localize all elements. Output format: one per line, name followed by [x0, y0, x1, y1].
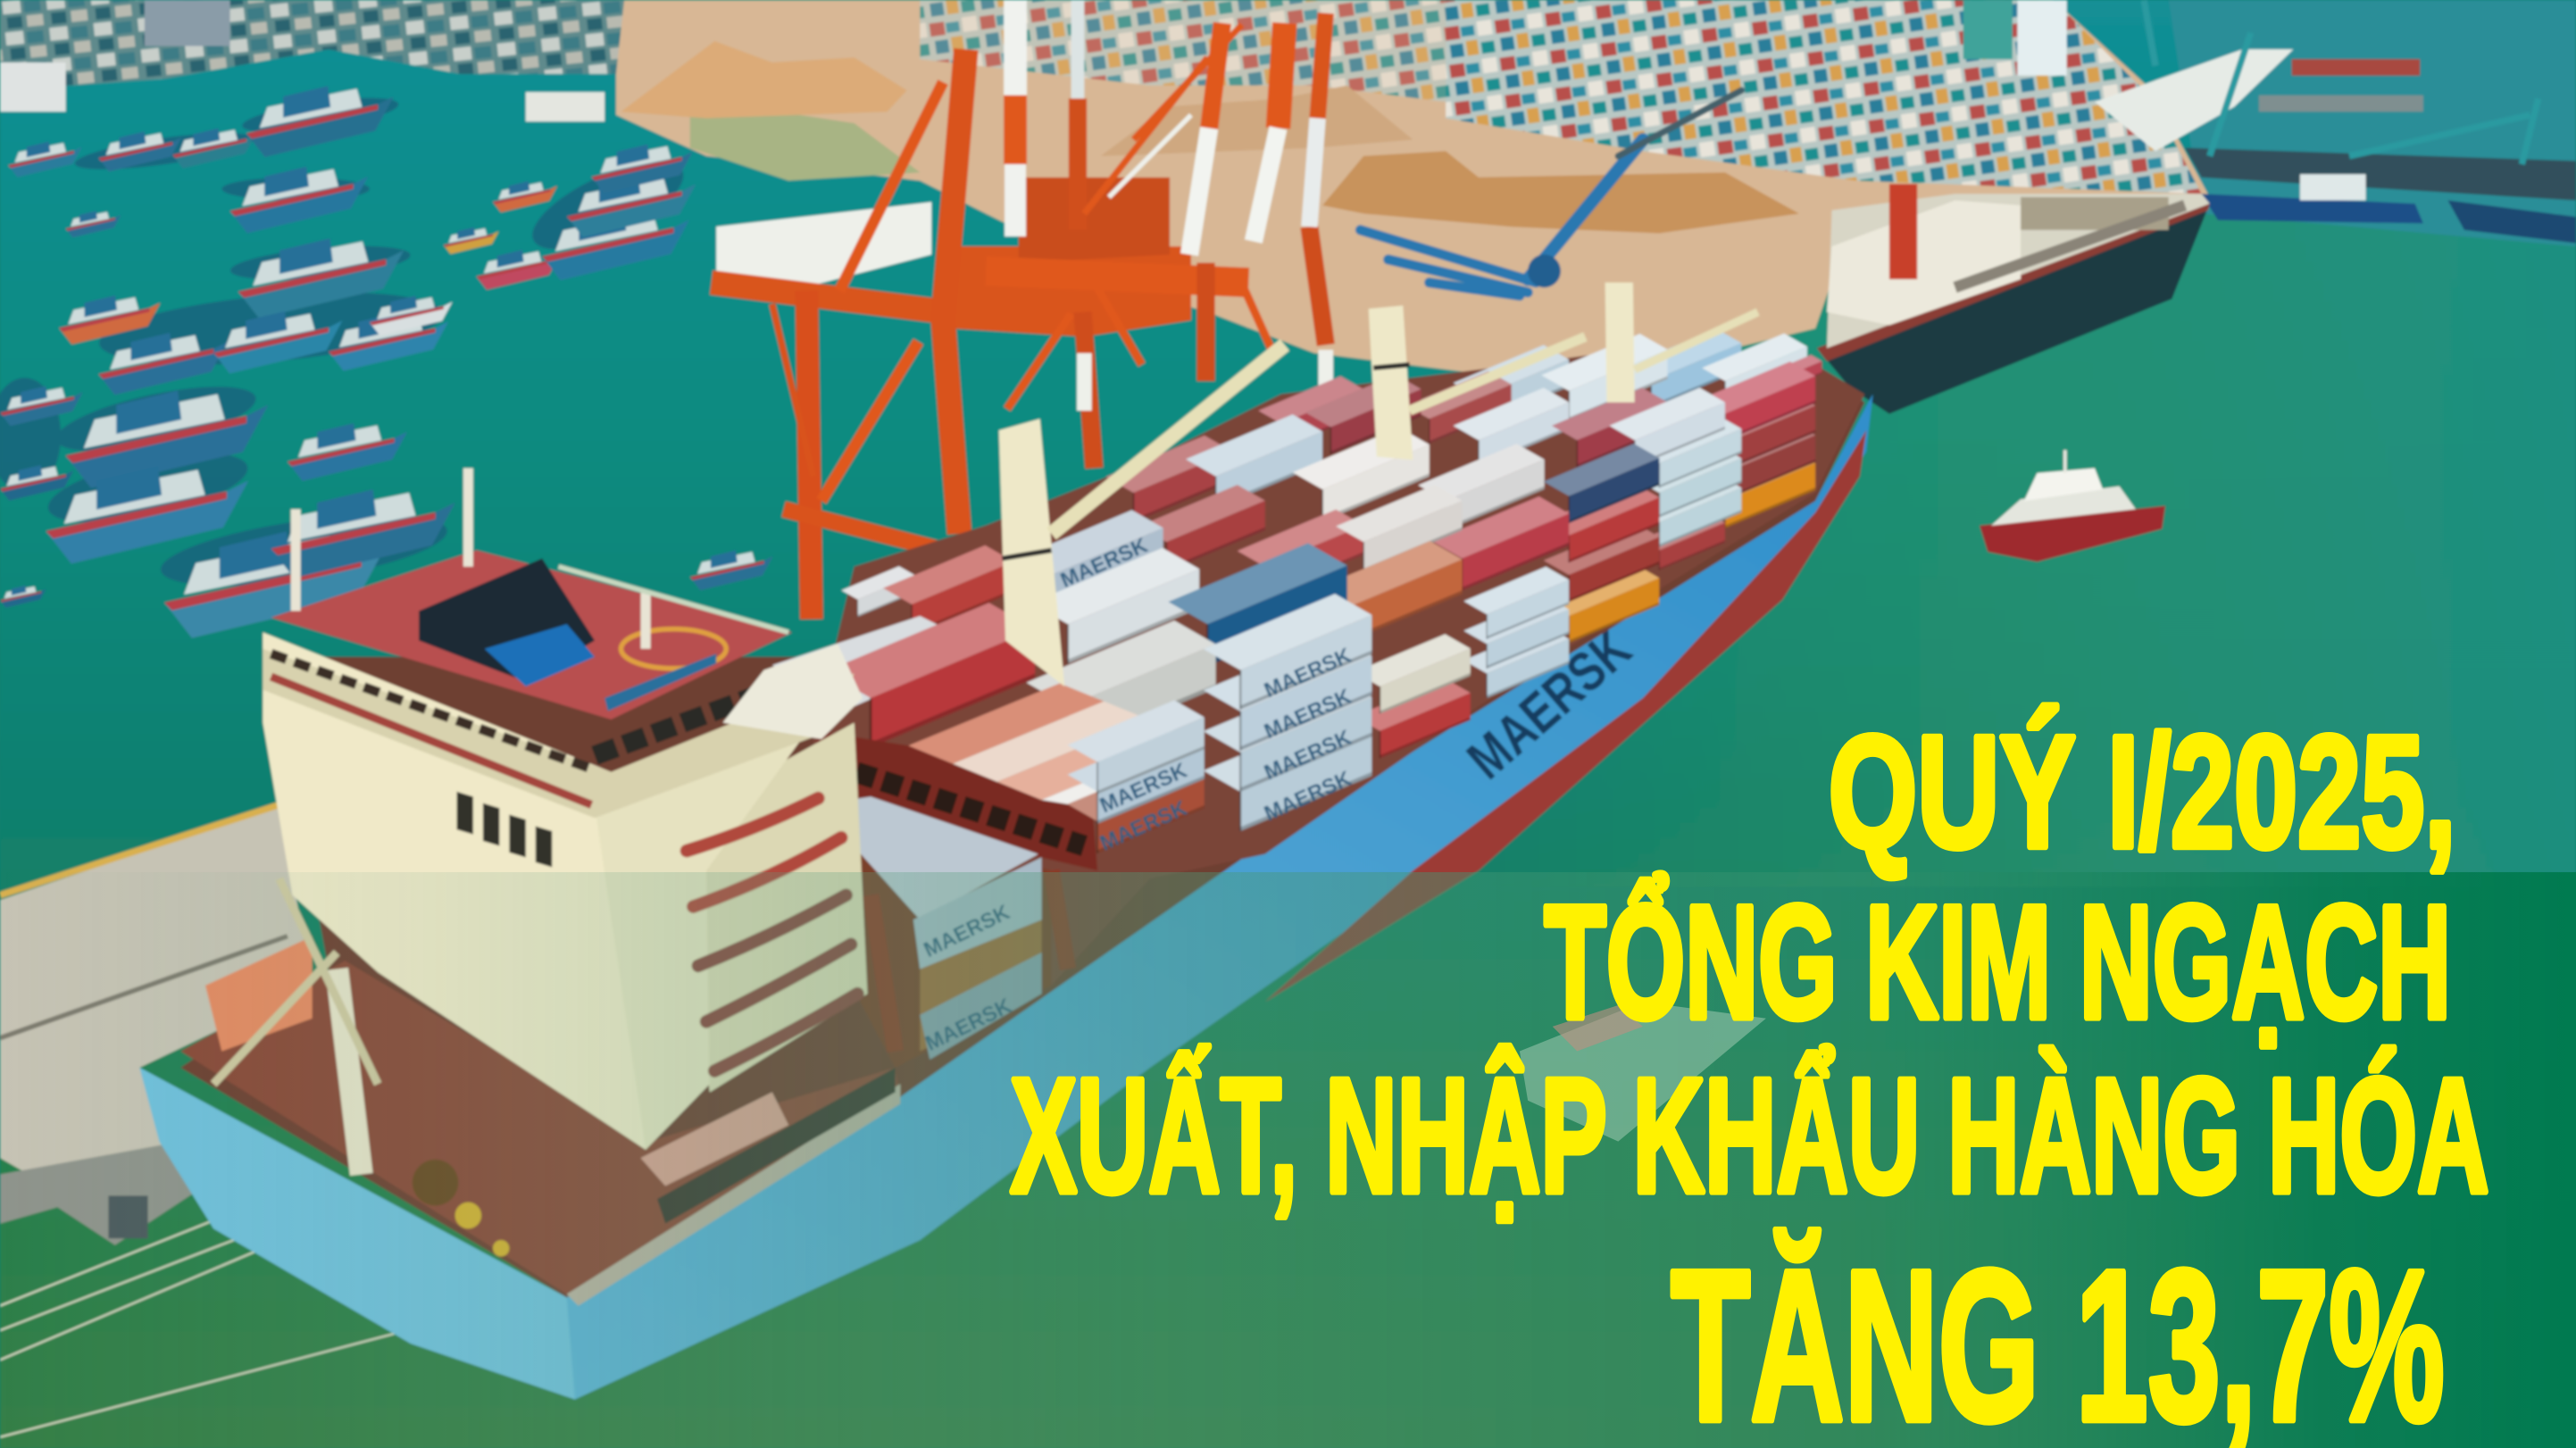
balcony backing [673, 723, 867, 1092]
city and harbour at top left [0, 0, 624, 121]
hull name: MAERSK [1455, 617, 1643, 791]
stern transom [139, 1068, 575, 1400]
label: MAERSK [1057, 533, 1152, 593]
aft face [263, 632, 646, 1150]
balconies [687, 798, 857, 1071]
port land and stockyard [616, 0, 2210, 386]
masts [296, 468, 646, 649]
rooftop helideck [271, 550, 792, 720]
container labels [920, 533, 1355, 1056]
aft windows [456, 792, 473, 835]
container cargo base [813, 348, 1864, 1068]
fishing boats: upper harbour [0, 86, 773, 638]
deck base [180, 364, 1864, 1297]
dock at lower left [0, 805, 395, 1437]
main container ship [139, 282, 1873, 1400]
label: MAERSK [1096, 758, 1191, 818]
tint band behind headline [0, 872, 2576, 1448]
tugboat [1980, 450, 2165, 562]
side face [593, 723, 813, 1150]
distant quay, ships and port cranes at top right [1963, 0, 2576, 243]
bridge deck and windows [263, 649, 854, 818]
funnel [419, 559, 595, 682]
ship hull [139, 395, 1873, 1400]
label: MAERSK [1261, 684, 1355, 744]
label: MAERSK [1261, 643, 1355, 703]
label: MAERSK [921, 994, 1016, 1056]
crane cab [716, 202, 931, 291]
hold frame [816, 731, 1097, 870]
stern deck [180, 961, 900, 1294]
ship deck cranes [999, 282, 1758, 687]
label: MAERSK [1261, 766, 1355, 826]
pink and white long tops [908, 683, 1104, 764]
gantry crane [712, 0, 1326, 620]
second ship at berth [1817, 184, 2210, 414]
label: MAERSK [920, 900, 1014, 962]
boat cluster shadows [0, 91, 695, 600]
ghost tug under the band [1520, 1002, 1766, 1142]
pale tops behind red container [772, 616, 986, 706]
label: MAERSK [1261, 725, 1355, 785]
bridge wing [723, 644, 863, 739]
rear bay containers [816, 796, 1068, 1068]
superstructure [263, 468, 867, 1150]
container stacks [772, 329, 1822, 870]
bridge name board [604, 653, 716, 712]
label: MAERSK [1096, 795, 1191, 856]
red boot stripe [1265, 430, 1866, 1002]
blue conveyor equipment [1360, 90, 1741, 295]
headline [1011, 702, 2488, 1448]
